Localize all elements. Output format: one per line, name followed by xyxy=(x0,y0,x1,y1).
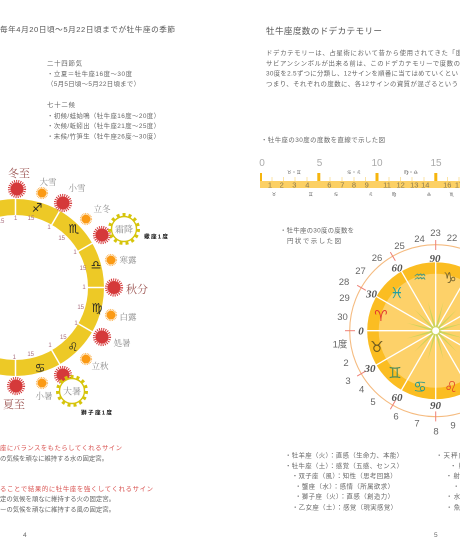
ring zodiac glyphs xyxy=(32,201,102,375)
text block: sign attributes: ・牡羊座（火）：直感（生命力、本能） xyxy=(285,450,403,460)
wheel degree markers: 30 xyxy=(364,363,376,375)
wheel zodiac glyphs: ♓︎ xyxy=(390,284,404,302)
wheel day numbers: 7 xyxy=(414,418,420,430)
ruler degree numbers: 6 xyxy=(327,180,331,190)
ruler scale numbers: 15 xyxy=(430,158,442,169)
caption: linear chart: ・牡牛座の30度の度数を直線で示した図 xyxy=(261,135,385,144)
highlighted sun: 大暑: 大暑 xyxy=(63,386,81,396)
solar term labels: 小暑 xyxy=(35,391,53,401)
ruler sign glyphs above: ♋・♌ xyxy=(347,170,361,176)
wheel day numbers: 2 xyxy=(343,358,349,369)
disc xyxy=(367,262,460,399)
wheel day numbers: 9 xyxy=(450,420,456,432)
ring zodiac glyphs: ♌︎ xyxy=(68,340,78,354)
text block: dodecatemory explanation: ドデカテモリーは、占星術において昔から使用されてきた「度 xyxy=(266,48,460,57)
text block: sign notes: の気候を頑なに維持する水の固定宮。 xyxy=(0,454,108,462)
solar term labels: 白露 xyxy=(119,312,137,322)
ring degree numbers: 1 xyxy=(13,355,17,361)
ring degree numbers: 15 xyxy=(27,352,35,358)
ruler degree numbers: 7 xyxy=(340,180,344,190)
solar term labels xyxy=(3,166,148,411)
ring degree numbers: 15 xyxy=(77,305,85,311)
ruler degree numbers: 2 xyxy=(280,180,284,190)
wheel zodiac glyphs: ♑︎ xyxy=(443,269,457,287)
ring zodiac glyphs: ♐︎ xyxy=(32,201,42,215)
text block: sign attributes: ・蟹座（水）：感情（所属欲求） xyxy=(295,482,394,490)
ruler scale numbers: 5 xyxy=(317,158,323,169)
ring degree numbers: 15 xyxy=(80,266,87,272)
ruler sign glyphs below: ♏ xyxy=(449,192,454,198)
ring degree numbers: 1 xyxy=(14,216,18,222)
ruler sign glyphs below: ♊ xyxy=(308,192,313,198)
chart: linear ruler of 30 degrees xyxy=(259,158,460,198)
wheel day numbers: 24 xyxy=(414,234,425,245)
ring degree numbers: 15 xyxy=(28,216,35,222)
ring degree numbers xyxy=(0,216,87,361)
spokes xyxy=(366,261,460,400)
text block: sign attributes xyxy=(285,450,460,512)
text block: sign notes: 座にバランスをもたらしてくれるサイン xyxy=(0,444,122,452)
text block: solar terms and seasonal pentads: 二十四節気 xyxy=(47,58,83,68)
wheel day numbers: 29 xyxy=(339,293,350,304)
ring degree numbers: 1 xyxy=(73,250,77,256)
wheel zodiac glyphs: ♉︎ xyxy=(370,338,384,356)
wheel day numbers: 23 xyxy=(430,228,441,239)
text block: sign attributes: ・獅子座（火）：直感（創造力） xyxy=(295,492,394,500)
page number 4: 4 xyxy=(23,532,27,539)
ruler degree numbers: 9 xyxy=(365,180,369,190)
ring degree numbers: 1 xyxy=(74,321,78,327)
wheel zodiac glyphs: ♋︎ xyxy=(413,378,427,396)
highlighted sun: 霜降: 霜降 xyxy=(115,224,133,234)
text block: solar terms and seasonal pentads: ・立夏＝牡牛座16度～30度 xyxy=(47,69,133,78)
wheel day numbers: 1度 xyxy=(333,338,348,350)
wheel day numbers: 25 xyxy=(394,241,405,252)
wheel day numbers xyxy=(333,228,457,438)
text block: dodecatemory explanation: 30度を2.5ずつに分類し、12サインを順番に当てはめていくとい xyxy=(266,68,458,78)
heading: Taurus season: 毎年4月20日頃～5月22日頃までが牡牛座の季節 xyxy=(0,24,175,34)
ring zodiac glyphs: ♋︎ xyxy=(35,361,45,375)
ruler degree numbers: 13 xyxy=(410,180,418,190)
callout: Scorpio 1 degree: 蠍座1度 xyxy=(144,232,168,240)
ruler degree numbers: 12 xyxy=(397,180,405,190)
wheel day numbers: 5 xyxy=(370,397,376,408)
solar term labels: 立冬 xyxy=(93,204,111,214)
solar term labels: 秋分 xyxy=(126,282,148,296)
wheel day numbers: 6 xyxy=(393,412,399,422)
wheel zodiac glyphs: ♈︎ xyxy=(374,307,388,325)
ruler degree numbers: 4 xyxy=(305,180,309,190)
ruler degree numbers: 16 xyxy=(443,180,451,190)
ruler degree numbers: 14 xyxy=(421,180,429,190)
wheel day numbers: 30 xyxy=(337,312,348,323)
ruler scale numbers: 10 xyxy=(371,158,383,169)
ruler sign glyphs below: ♍ xyxy=(392,192,397,198)
highlighted sun: 大暑 xyxy=(58,376,86,406)
solar term labels: 寒露 xyxy=(119,255,137,265)
ruler sign glyphs below: ♉ xyxy=(272,192,277,198)
text block: sign notes: 定の気候を頑なに維持する火の固定宮。 xyxy=(0,494,115,503)
solar term labels: 夏至 xyxy=(3,398,25,411)
text block: sign notes: ることで結果的に牡牛座を強くしてくれるサイン xyxy=(0,484,153,493)
outer circle with ticks xyxy=(345,240,460,421)
solar term labels: 小雪 xyxy=(68,183,86,193)
ring zodiac glyphs: ♍︎ xyxy=(92,301,102,315)
center star xyxy=(406,301,460,360)
solar term labels: 処暑 xyxy=(113,338,131,348)
wheel degree markers: 60 xyxy=(392,262,403,274)
callout: Leo 1 degree: 獅子座1度 xyxy=(81,408,112,416)
ruler sign glyphs above xyxy=(287,170,418,176)
red suns: major terms xyxy=(8,181,122,394)
solar term labels: 立秋 xyxy=(91,361,109,371)
chart: circular degree wheel xyxy=(333,228,460,438)
text block: sign attributes: ・乙女座（土）：感覚（現実感覚） xyxy=(292,502,397,512)
text block: dodecatemory explanation: つまり、それぞれの度数に、各12サインの資質が混ざるという xyxy=(266,79,458,88)
ruler degree numbers: 8 xyxy=(352,180,356,190)
ruler scale numbers: 0 xyxy=(259,158,265,169)
text block: sign attributes: ・牡牛座（土）：感覚（五感、センス） xyxy=(285,461,403,470)
caption: circular chart: 円状で示した図 xyxy=(287,236,341,245)
wheel degree markers: 0 xyxy=(358,326,364,338)
ring degree numbers: 1 xyxy=(47,225,51,231)
wheel zodiac glyphs xyxy=(370,268,458,396)
ring band xyxy=(0,198,105,377)
wheel day numbers: 22 xyxy=(447,233,457,244)
text block: solar terms and seasonal pentads: ・次候/蚯蚓出（牡牛座21度～25度） xyxy=(47,121,160,130)
wheel degree markers xyxy=(358,253,442,412)
ruler degree numbers xyxy=(268,180,460,190)
wheel degree markers: 30 xyxy=(365,288,378,300)
wheel zodiac glyphs: ♌︎ xyxy=(444,378,458,396)
highlighted sun: 霜降 xyxy=(110,214,138,244)
wheel day numbers: 27 xyxy=(355,266,366,277)
wheel degree markers: 90 xyxy=(430,400,442,412)
text block: solar terms and seasonal pentads xyxy=(47,58,160,140)
chart: zodiac seasonal ring xyxy=(0,166,168,411)
ruler degree numbers: 3 xyxy=(292,180,296,190)
text block: dodecatemory explanation: サビアンシンボルが出来る前は、このドデカテモリーで度数の xyxy=(266,58,460,68)
ring degree numbers: 1 xyxy=(82,285,86,291)
ring degree numbers: 15 xyxy=(58,236,66,242)
ruler sign glyphs below: ♎ xyxy=(427,192,432,198)
wheel degree markers: 60 xyxy=(392,392,403,404)
ruler degree numbers: 1 xyxy=(268,180,272,190)
heading: dodecatemory: 牡牛座度数のドデカテモリー xyxy=(266,25,382,36)
ruler sign glyphs below: ♌ xyxy=(368,192,373,198)
ruler sign glyphs above: ♉・♊ xyxy=(287,170,301,176)
wheel zodiac glyphs: ♊︎ xyxy=(388,364,402,382)
page number 5: 5 xyxy=(434,532,438,539)
text block: solar terms and seasonal pentads: ・末候/竹笋生（牡牛座26度～30度） xyxy=(47,132,160,140)
text block: solar terms and seasonal pentads: ・初候/蛙始鳴（牡牛座16度～20度） xyxy=(47,111,160,120)
ring zodiac glyphs: ♏︎ xyxy=(69,222,79,236)
solar term labels: 冬至 xyxy=(8,166,30,180)
ring zodiac glyphs: ♎︎ xyxy=(91,258,101,272)
text block: sign attributes: ・双子座（風）：知性（思考回路） xyxy=(292,471,397,480)
wheel day numbers: 26 xyxy=(372,253,382,264)
wheel day numbers: 4 xyxy=(359,384,364,396)
wheel zodiac glyphs: ♒︎ xyxy=(413,268,427,286)
ruler sign glyphs below: ♋ xyxy=(334,192,338,198)
solar term labels: 大雪 xyxy=(39,177,57,187)
text block: solar terms and seasonal pentads: 七十二候 xyxy=(47,100,76,109)
wheel day numbers: 3 xyxy=(345,376,351,387)
text block: sign notes: ーの気候を頑なに維持する風の固定宮。 xyxy=(0,504,115,514)
ruler scale numbers xyxy=(259,158,442,169)
text block: dodecatemory explanation xyxy=(266,48,460,88)
text block: sign notes xyxy=(0,444,153,514)
wheel degree markers: 90 xyxy=(430,253,441,265)
caption: circular chart: ・牡牛座の30度の度数を xyxy=(280,226,354,234)
ring degree numbers: 15 xyxy=(60,335,67,341)
ruler band and ticks xyxy=(260,173,460,188)
ring degree numbers: 1 xyxy=(48,343,52,349)
orange suns: minor terms xyxy=(37,188,116,388)
caption: circular chart xyxy=(280,226,354,245)
ruler sign glyphs above: ♍・♎ xyxy=(404,170,418,176)
ruler degree numbers: 11 xyxy=(383,180,391,190)
text block: solar terms and seasonal pentads: （5月5日頃～5月22日頃まで） xyxy=(47,79,140,88)
ruler sign glyphs below xyxy=(272,192,454,198)
wheel day numbers: 8 xyxy=(433,426,439,438)
wheel day numbers: 28 xyxy=(339,277,349,288)
